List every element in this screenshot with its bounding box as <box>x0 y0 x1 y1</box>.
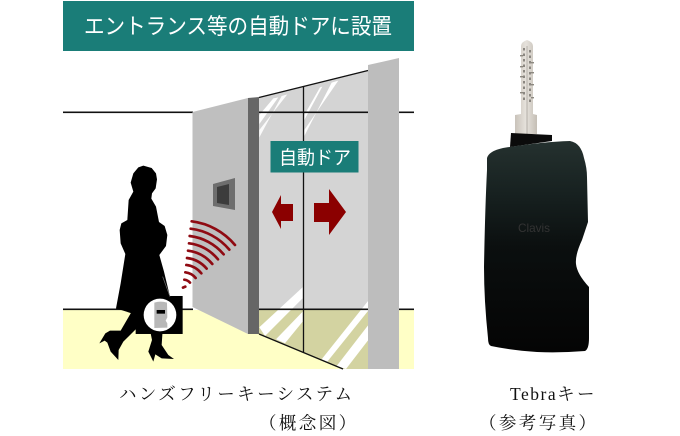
floor <box>63 310 414 369</box>
door sign <box>270 141 358 172</box>
title banner <box>63 1 414 51</box>
key fob body <box>484 141 589 352</box>
arrow: left <box>272 195 293 229</box>
wall lines <box>63 112 414 310</box>
logo text: Clavis <box>518 221 550 235</box>
caption: Tebra key: Tebraキー <box>510 384 597 404</box>
arrow: right <box>314 189 346 235</box>
left wall panel with sensor <box>192 97 259 334</box>
key collar <box>510 133 552 147</box>
door sign: 自動ドア <box>279 147 351 169</box>
caption: conceptual diagram: （概念図） <box>259 413 358 433</box>
key badge <box>144 299 176 331</box>
right pillar <box>368 58 399 369</box>
caption: hands-free key system: ハンズフリーキーシステム <box>119 384 354 404</box>
woman silhouette <box>99 166 183 362</box>
illustration: entrance scene <box>63 58 414 369</box>
Tebra key photo <box>484 40 589 352</box>
title banner: エントランス等の自動ドアに設置 <box>84 14 392 39</box>
glass door <box>259 70 368 369</box>
sensor wave signal <box>183 221 235 288</box>
caption: reference photo: （参考写真） <box>479 413 598 433</box>
key blade <box>515 40 537 134</box>
